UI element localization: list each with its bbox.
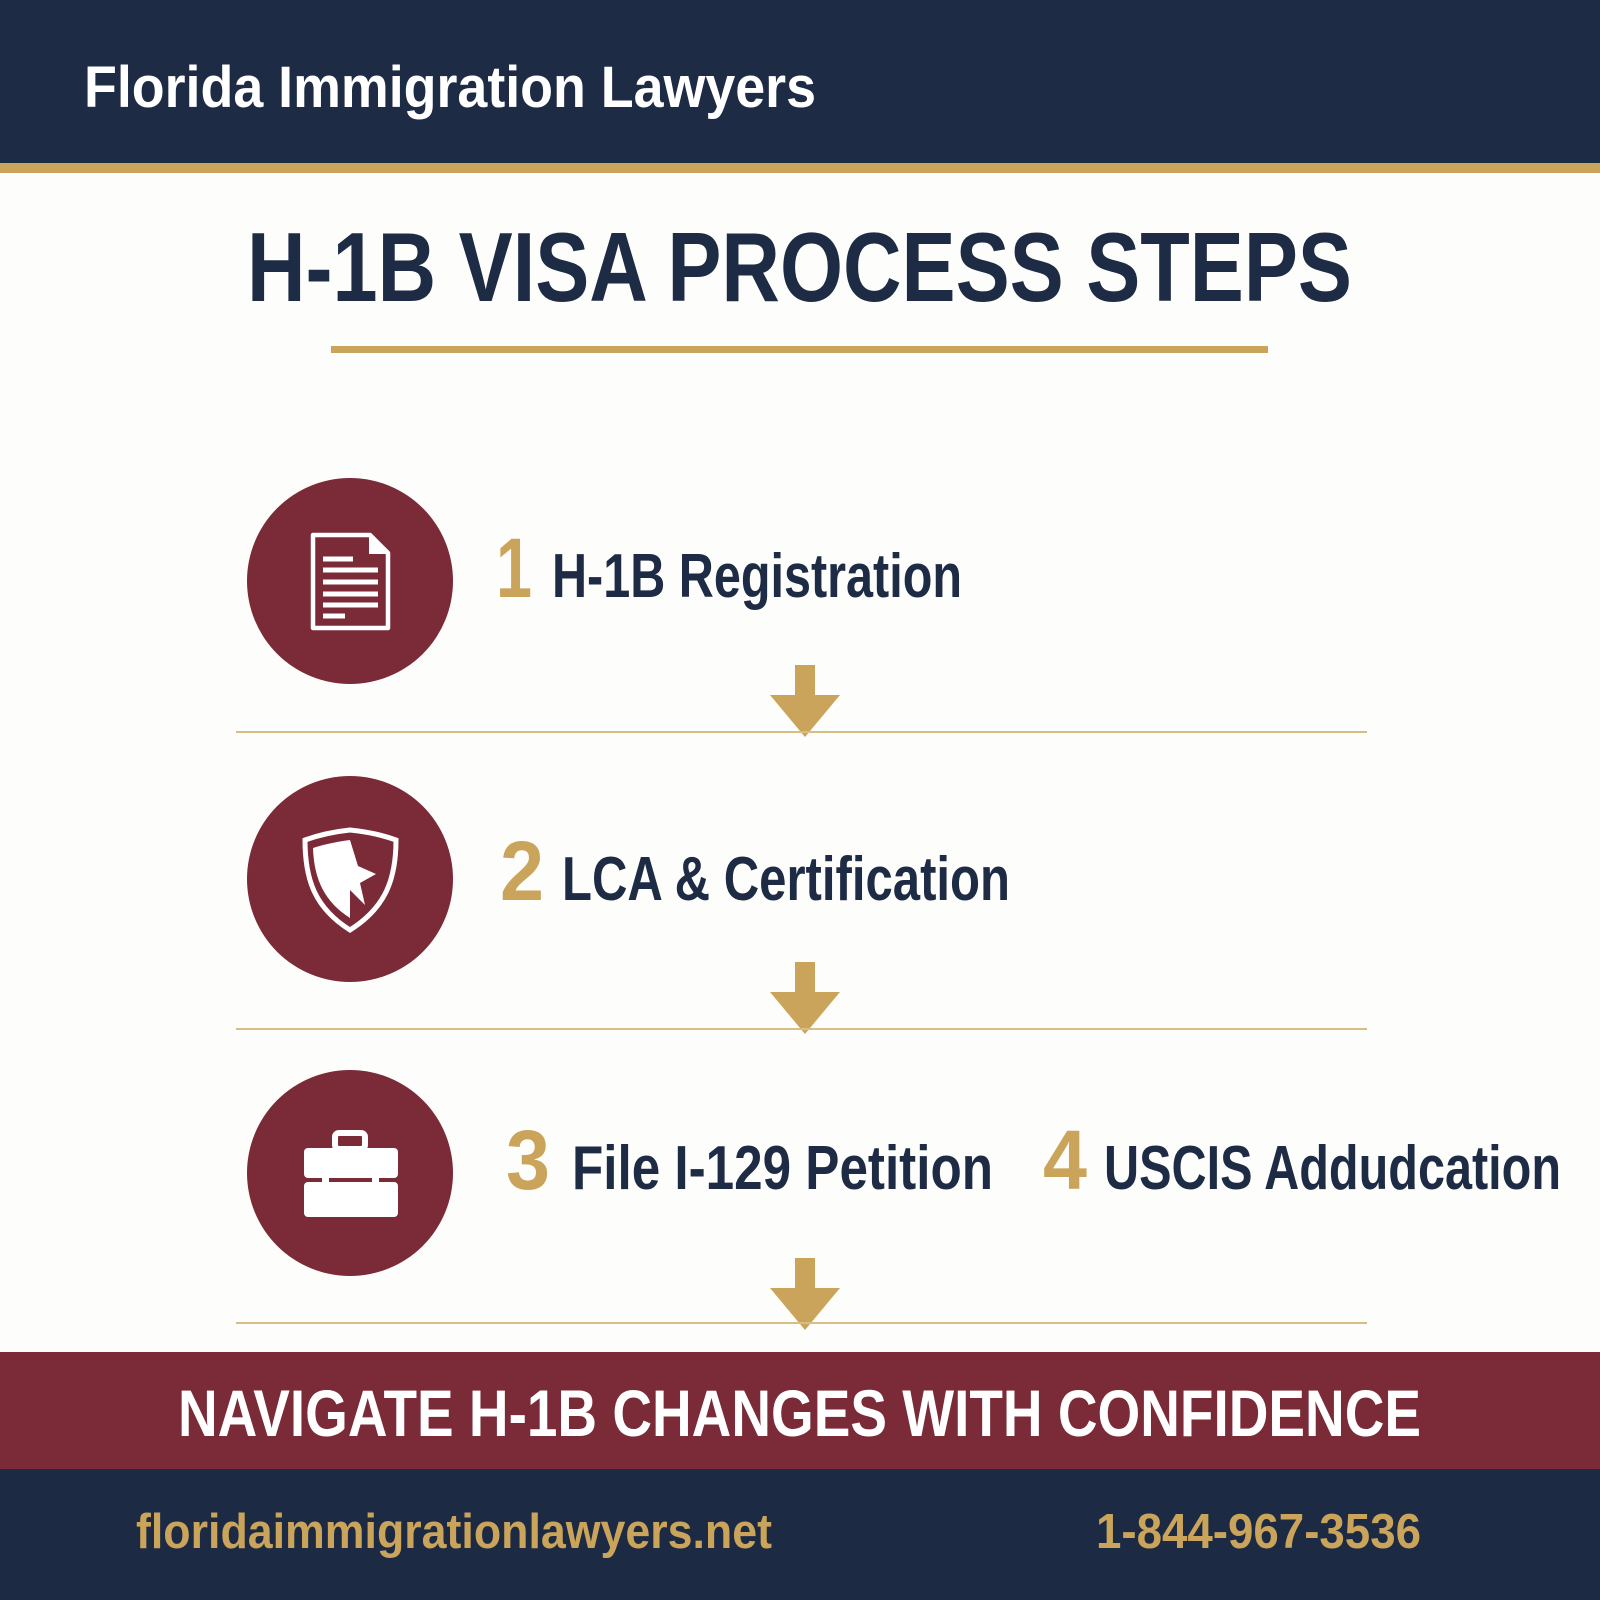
step label 2: LCA & Certification xyxy=(562,845,1010,914)
step 3 and 4 xyxy=(247,1070,1561,1276)
arrow 2 xyxy=(770,962,840,1034)
title: H-1B VISA PROCESS STEPS xyxy=(247,212,1352,322)
phone: 1-844-967-3536 xyxy=(1096,1505,1421,1559)
step number 1: 1 xyxy=(496,521,532,615)
arrow 1 xyxy=(770,665,840,737)
icon: shield xyxy=(247,776,453,982)
website: floridaimmigrationlawyers.net xyxy=(136,1505,772,1559)
step number 4: 4 xyxy=(1043,1113,1087,1207)
step label 1: H-1B Registration xyxy=(552,542,962,611)
footer xyxy=(0,1469,1600,1600)
icon: briefcase xyxy=(247,1070,453,1276)
step number 2: 2 xyxy=(500,824,544,918)
step number 3: 3 xyxy=(506,1113,550,1207)
step 1 xyxy=(247,478,962,684)
step label 3: File I-129 Petition xyxy=(572,1134,993,1203)
step 2 xyxy=(247,776,1010,982)
banner xyxy=(0,1352,1600,1469)
title underline xyxy=(331,346,1268,353)
icon: document xyxy=(247,478,453,684)
header text: Florida Immigration Lawyers xyxy=(84,55,816,120)
arrow 3 xyxy=(770,1258,840,1330)
header bar xyxy=(0,0,1600,173)
